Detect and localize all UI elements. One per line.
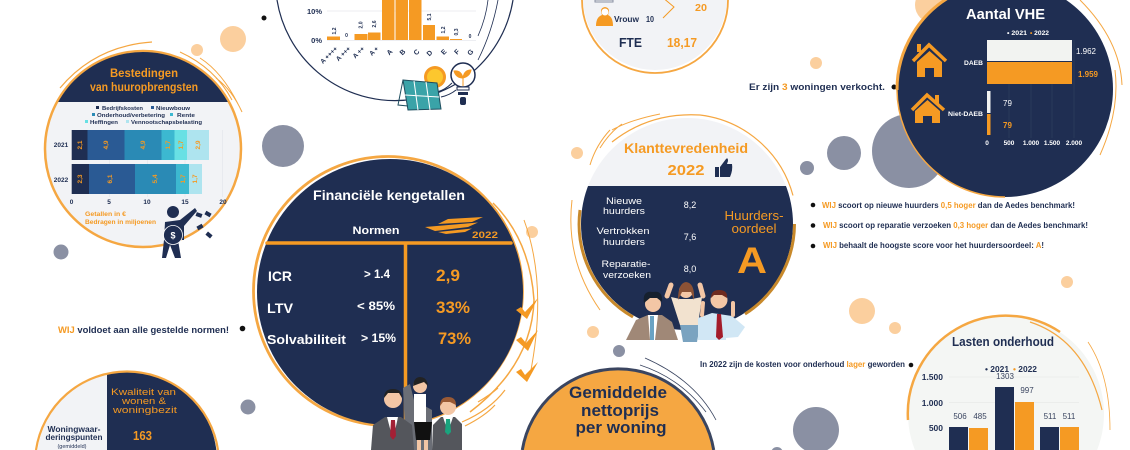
value labels bbox=[332, 13, 472, 40]
category labels: A bbox=[386, 48, 394, 57]
statement 3: WIJ behaalt de hoogste score voor het huurdersoordeel: A! bbox=[823, 241, 1044, 250]
stacked bar chart: 1,7 bbox=[180, 174, 187, 184]
bar chart: 0 bbox=[985, 140, 989, 147]
category labels: C bbox=[413, 48, 421, 57]
text: FTE bbox=[619, 35, 697, 50]
huurdersoordeel A bbox=[724, 209, 784, 281]
heading: per woning bbox=[576, 418, 666, 437]
value labels: 1,2 bbox=[332, 27, 338, 34]
stacked bar chart: 2,9 bbox=[195, 140, 202, 150]
heading: woningbezit bbox=[112, 405, 177, 416]
statement: woningen verkocht: Er zijn 3 woningen verkocht. bbox=[749, 82, 885, 92]
text: FTE: 18,17 bbox=[667, 35, 697, 50]
value labels: 0 bbox=[345, 33, 348, 39]
stacked bar chart: 1,7 bbox=[165, 140, 172, 150]
text: vrouw count: Vrouw bbox=[614, 15, 640, 24]
row: solvabiliteit bbox=[267, 329, 471, 348]
panel: gemiddelde nettoprijs per woning bbox=[522, 358, 716, 450]
legend: Bedrijfskosten bbox=[102, 106, 144, 112]
category labels: A + bbox=[368, 45, 381, 58]
stacked bar chart: 10 bbox=[143, 199, 151, 206]
heading bbox=[90, 66, 198, 94]
statement 1: WIJ scoort op nieuwe huurders 0,5 hoger dan de Aedes benchmark! bbox=[822, 201, 1075, 210]
axis labels: 10% bbox=[307, 7, 322, 16]
bars bbox=[327, 0, 462, 40]
stacked bar chart: 5,4 bbox=[152, 174, 159, 184]
stacked bar chart: 4,9 bbox=[103, 140, 110, 150]
stacked bar chart: 1,7 bbox=[192, 174, 199, 184]
panel: kwaliteit van wonen en woningbezit bbox=[36, 365, 227, 450]
row: LTV bbox=[267, 298, 470, 317]
heading: 2022 bbox=[668, 162, 704, 179]
stacked bar chart: 15 bbox=[181, 199, 189, 206]
heading: Lasten onderhoud bbox=[952, 335, 1054, 349]
legend bbox=[85, 106, 202, 126]
legend bbox=[985, 365, 1038, 374]
panel: aantal VHE bbox=[897, 0, 1122, 197]
stacked bar chart: 20 bbox=[219, 199, 227, 206]
bullet list: benchmark statements bbox=[811, 201, 1088, 250]
heading: wonen & bbox=[121, 396, 167, 407]
column header: 2022 with swoosh: 2022 bbox=[472, 230, 498, 241]
heading: Gemiddelde bbox=[569, 383, 667, 402]
stacked bar chart: 2,3 bbox=[77, 174, 84, 184]
category labels: B bbox=[399, 48, 407, 57]
icon: house DAEB bbox=[913, 44, 946, 77]
bar chart: 79 bbox=[1003, 99, 1012, 108]
statement 2: WIJ scoort op reparatie verzoeken 0,3 hoger dan de Aedes benchmark! bbox=[823, 221, 1088, 230]
huurdersoordeel A: Huurders- bbox=[724, 209, 784, 223]
bar chart: 485 bbox=[973, 412, 987, 421]
heading: Klanttevredenheid bbox=[624, 140, 748, 156]
row: vertrokken huurders: Vertrokken bbox=[596, 226, 650, 236]
heading bbox=[624, 140, 748, 179]
icon: person with money bag: $ bbox=[170, 230, 176, 240]
category labels: A ++++ bbox=[319, 45, 340, 66]
bar chart: 500 bbox=[1004, 140, 1015, 147]
bar chart: 500 bbox=[929, 423, 943, 433]
heading: van huuropbrengsten bbox=[90, 82, 198, 94]
stacked bar chart: 2,1 bbox=[77, 140, 84, 150]
statement: normen: WIJ voldoet aan alle gestelde normen! bbox=[58, 325, 229, 335]
legend: Vennootschapsbelasting bbox=[131, 120, 202, 126]
panel: klanttevredenheid bbox=[571, 114, 800, 342]
icon: house niet-DAEB bbox=[912, 95, 944, 123]
bar chart: 1.500 bbox=[922, 372, 943, 382]
icon: woman bbox=[595, 0, 613, 26]
axis labels bbox=[307, 7, 322, 45]
row: LTV: 33% bbox=[436, 298, 470, 317]
bar chart bbox=[922, 372, 1079, 450]
bullet bbox=[262, 16, 266, 20]
legend: • 2021 bbox=[985, 365, 1010, 374]
icon: person with money bag bbox=[162, 206, 213, 258]
value labels: 1,2 bbox=[441, 26, 447, 33]
label: woningwaarderingspunten: (gemiddeld) bbox=[57, 444, 87, 450]
stacked bar chart: 4,9 bbox=[140, 140, 147, 150]
bar chart: 997 bbox=[1020, 386, 1034, 395]
bar chart: 1.500 bbox=[1044, 140, 1061, 147]
value labels: 5,1 bbox=[427, 13, 433, 20]
row: reparatieverzoeken: Reparatie- bbox=[602, 259, 650, 269]
legend: • 2022 bbox=[1013, 365, 1038, 374]
row: reparatieverzoeken bbox=[602, 259, 696, 280]
row: ICR: 2,9 bbox=[436, 266, 460, 285]
row: LTV: < 85% bbox=[357, 299, 395, 313]
category labels: A ++ bbox=[352, 45, 367, 60]
column header: 2022 with swoosh bbox=[425, 217, 498, 241]
huurdersoordeel A: A bbox=[737, 240, 767, 281]
row: LTV: LTV bbox=[267, 300, 294, 316]
stacked bar chart: 2021 bbox=[54, 142, 69, 149]
bar chart: 1303 bbox=[996, 372, 1014, 381]
row: ICR: > 1.4 bbox=[364, 267, 390, 281]
heading: Kwaliteit van bbox=[111, 387, 176, 398]
bar chart: 1.959 bbox=[1078, 70, 1099, 79]
heading: nettoprijs bbox=[581, 401, 659, 420]
row: reparatieverzoeken: 8,0 bbox=[684, 264, 696, 274]
heading: Bestedingen bbox=[110, 66, 178, 80]
axis labels: 0% bbox=[311, 36, 322, 45]
bar chart: 1.000 bbox=[1023, 140, 1040, 147]
row: nieuwe huurders: huurders bbox=[603, 206, 646, 216]
label: woningwaarderingspunten bbox=[46, 425, 103, 450]
row: nieuwe huurders: Nieuwe bbox=[606, 196, 642, 206]
heading: Financiële kengetallen bbox=[313, 187, 465, 203]
icon: solar panel, sun and light bulb bbox=[398, 63, 475, 110]
bar chart: 79 bbox=[1003, 121, 1012, 130]
heading: Aantal VHE bbox=[966, 6, 1045, 23]
bar chart bbox=[948, 40, 1099, 147]
legend: • 2022 bbox=[1030, 31, 1050, 37]
row: reparatieverzoeken: verzoeken bbox=[603, 270, 651, 280]
row: nieuwe huurders: 8,2 bbox=[684, 200, 696, 210]
bar chart: 2.000 bbox=[1066, 140, 1083, 147]
row: vertrokken huurders: 7,6 bbox=[684, 232, 696, 242]
value labels: 2,6 bbox=[372, 20, 378, 27]
text: vrouw count: 10 bbox=[646, 15, 654, 24]
row: vertrokken huurders: huurders bbox=[603, 237, 646, 247]
stacked bar chart bbox=[54, 130, 227, 206]
value: 163: 163 bbox=[133, 429, 152, 443]
panel: bestedingen van huuropbrengsten bbox=[40, 40, 250, 258]
row: ICR: ICR bbox=[268, 268, 292, 284]
text: vrouw count bbox=[614, 15, 654, 24]
legend: Rente bbox=[177, 113, 195, 119]
row: ICR bbox=[268, 266, 460, 285]
heading bbox=[111, 387, 177, 416]
icon: check marks bbox=[516, 298, 538, 382]
bar chart: Niet-DAEB bbox=[948, 112, 984, 118]
legend bbox=[1007, 31, 1050, 37]
icon: thumbs up bbox=[715, 158, 732, 177]
legend: • 2021 bbox=[1007, 31, 1028, 37]
stacked bar chart: 0 bbox=[70, 199, 74, 206]
panel: personeel: 20 bbox=[695, 3, 707, 14]
stacked bar chart: 2022 bbox=[54, 177, 69, 184]
row: nieuwe huurders bbox=[603, 196, 696, 216]
panel: energy labels chart bbox=[262, 0, 513, 110]
legend: Heffingen bbox=[90, 120, 119, 126]
category labels: E bbox=[440, 48, 449, 57]
header band bbox=[58, 52, 228, 102]
huurdersoordeel A: oordeel bbox=[732, 222, 776, 236]
category labels: D bbox=[426, 49, 434, 58]
row: solvabiliteit: Solvabiliteit bbox=[267, 332, 347, 347]
row: vertrokken huurders bbox=[596, 226, 696, 247]
value labels: 0 bbox=[469, 34, 472, 40]
row: solvabiliteit: 73% bbox=[438, 329, 471, 348]
value labels: 2,0 bbox=[358, 21, 364, 28]
stacked bar chart: 5 bbox=[107, 199, 111, 206]
label: woningwaarderingspunten: deringspunten bbox=[46, 433, 103, 442]
label: woningwaarderingspunten: Woningwaar- bbox=[48, 425, 101, 434]
legend: Onderhoud/verbetering bbox=[97, 113, 165, 119]
category labels: F bbox=[453, 48, 462, 56]
note: amounts: Bedragen in miljoenen bbox=[85, 219, 156, 226]
icon: three business people bbox=[371, 377, 462, 450]
statement: onderhoudskosten: In 2022 zijn de kosten voor onderhoud lager geworden bbox=[700, 360, 905, 369]
bar chart: 511 bbox=[1044, 412, 1057, 421]
panel: lasten onderhoud bbox=[908, 316, 1110, 450]
value labels: 0,3 bbox=[454, 28, 460, 35]
column header: normen: Normen bbox=[352, 225, 400, 237]
icon: happy customers bbox=[626, 282, 745, 342]
row: solvabiliteit: > 15% bbox=[361, 331, 396, 345]
text: FTE: FTE bbox=[619, 35, 642, 50]
panel: personeel bbox=[582, 0, 728, 73]
bar chart: 1.000 bbox=[922, 398, 943, 408]
bar chart: 1.962 bbox=[1076, 47, 1097, 56]
heading bbox=[569, 383, 667, 437]
note: amounts bbox=[85, 211, 156, 226]
bar chart: DAEB bbox=[964, 61, 984, 67]
panel: financiële kengetallen bbox=[254, 156, 538, 450]
legend: Nieuwbouw bbox=[156, 106, 191, 112]
stacked bar chart: 1,7 bbox=[178, 140, 185, 150]
bar chart: 506 bbox=[953, 412, 967, 421]
category labels: G bbox=[467, 48, 476, 57]
bar chart: 511 bbox=[1063, 412, 1076, 421]
stacked bar chart: 6,1 bbox=[107, 174, 114, 184]
category labels bbox=[319, 45, 476, 66]
note: amounts: Getallen in € bbox=[85, 211, 126, 218]
category labels: A +++ bbox=[335, 45, 353, 63]
